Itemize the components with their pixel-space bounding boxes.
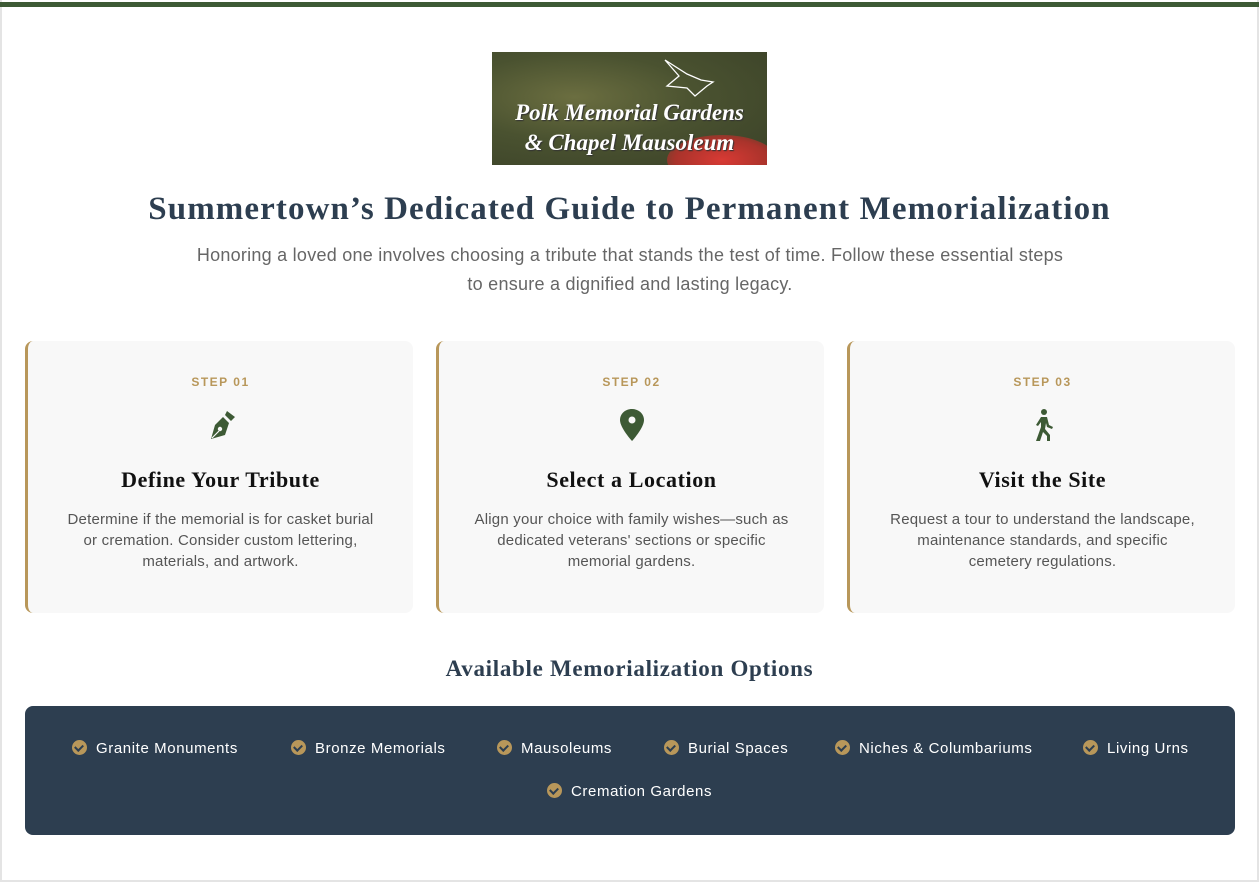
options panel: Mausoleums xyxy=(521,740,612,757)
options panel xyxy=(25,706,1235,835)
options panel: Granite Monuments xyxy=(96,740,238,757)
card: step 2: memorial gardens. xyxy=(568,553,695,570)
logo: & Chapel Mausoleum xyxy=(525,130,734,155)
icon: pen xyxy=(211,411,235,439)
card: step 3: STEP 03 xyxy=(1013,375,1072,389)
options panel: Niches & Columbariums xyxy=(859,740,1032,757)
card: step 2: dedicated veterans' sections or specific xyxy=(497,532,766,549)
icon: location pin xyxy=(620,409,644,441)
card: step 2: Align your choice with family wishes—such as xyxy=(475,511,788,528)
icon: walking xyxy=(1036,409,1053,441)
options panel: Burial Spaces xyxy=(688,740,788,757)
card: step 1: materials, and artwork. xyxy=(142,553,299,570)
card: step 2: STEP 02 xyxy=(602,375,661,389)
card: step 3: maintenance standards, and specific xyxy=(917,532,1168,549)
card: step 1: Determine if the memorial is for casket burial xyxy=(68,511,373,528)
subtitle: to ensure a dignified and lasting legacy. xyxy=(467,274,793,294)
logo xyxy=(492,52,767,165)
options heading: Available Memorialization Options xyxy=(446,656,813,681)
options panel: Living Urns xyxy=(1107,740,1189,757)
card: step 1: Define Your Tribute xyxy=(121,467,320,492)
card: step 1 xyxy=(25,341,413,613)
card: step 1: or cremation. Consider custom lettering, xyxy=(84,532,357,549)
card: step 2: Select a Location xyxy=(546,467,717,492)
card: step 2 xyxy=(436,341,824,613)
options panel: Cremation Gardens xyxy=(571,783,712,800)
subtitle: Honoring a loved one involves choosing a tribute that stands the test of time. Follow these essential steps xyxy=(197,245,1063,265)
subtitle xyxy=(197,245,1063,294)
card: step 3: Visit the Site xyxy=(979,467,1106,492)
card: step 3: cemetery regulations. xyxy=(969,553,1116,570)
card: step 3: Request a tour to understand the landscape, xyxy=(890,511,1195,528)
card: step 1: STEP 01 xyxy=(191,375,250,389)
title: Summertown’s Dedicated Guide to Permanent Memorialization xyxy=(148,191,1111,227)
options panel: Bronze Memorials xyxy=(315,740,445,757)
logo: Polk Memorial Gardens xyxy=(515,100,744,125)
card: step 3 xyxy=(847,341,1235,613)
